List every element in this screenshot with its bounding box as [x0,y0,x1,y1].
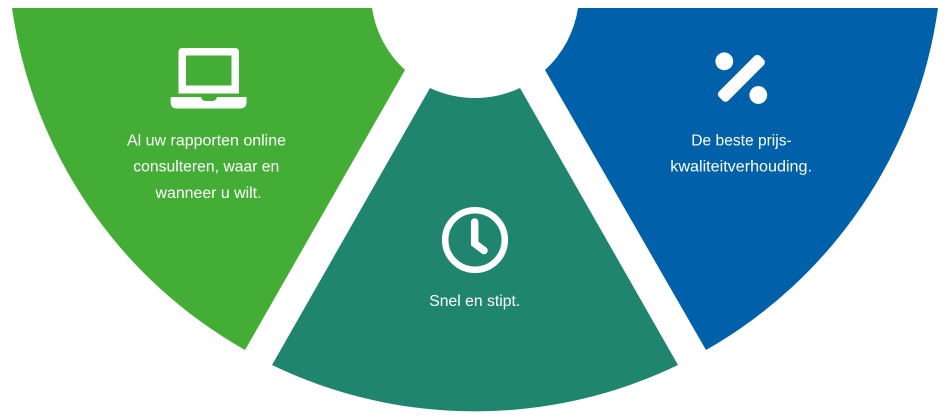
text: online reports: wanneer u wilt. [154,185,262,202]
teal segment [272,88,678,411]
text: best value [670,133,812,176]
icon: laptop [171,48,246,108]
blue segment [545,8,938,350]
icon: percent [715,52,767,104]
panel: online reports [12,8,405,350]
text: online reports: consulteren, waar en [133,159,279,176]
text: online reports [127,133,286,202]
icon: clock [445,210,505,270]
text: best value: De beste prijs- [691,133,792,150]
text: fast and punctual: Snel en stipt. [429,293,520,310]
panel: best value [545,8,938,350]
panel: fast and punctual [272,88,678,411]
green segment [12,8,405,350]
text: best value: kwaliteitverhouding. [670,159,812,176]
text: online reports: Al uw rapporten online [127,133,286,150]
